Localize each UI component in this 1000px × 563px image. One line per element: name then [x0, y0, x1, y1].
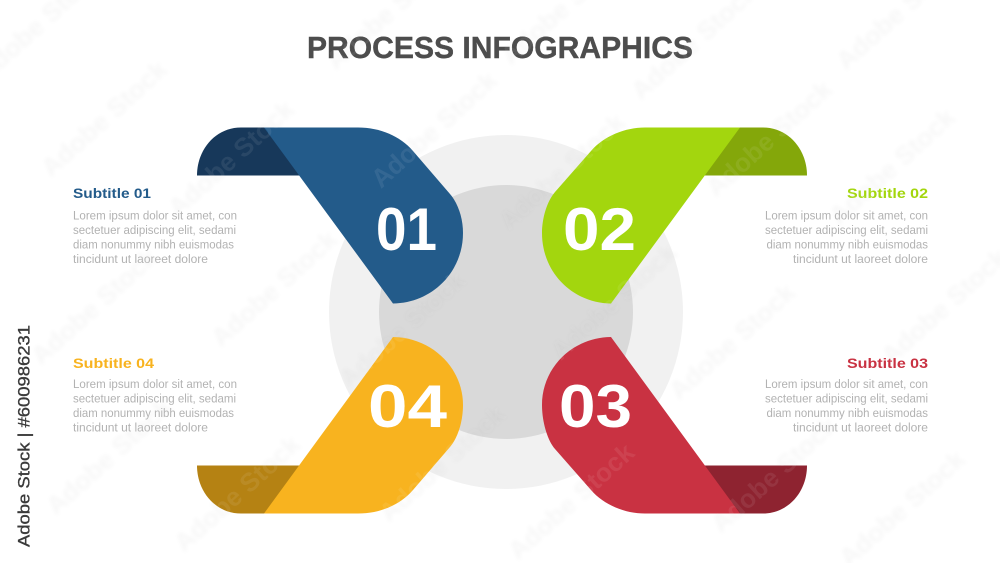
watermark: repeated Adobe Stock marks: Adobe Stock: [493, 107, 631, 236]
text block: subtitle 04: sectetuer adipiscing elit, sedami: [73, 392, 236, 406]
watermark: repeated Adobe Stock marks: Adobe Stock: [663, 277, 801, 406]
text block: subtitle 03: Lorem ipsum dolor sit amet, con: [765, 377, 928, 391]
watermark: repeated Adobe Stock marks: Adobe Stock: [365, 65, 503, 194]
watermark: repeated Adobe Stock marks: Adobe Stock: [333, 265, 471, 394]
stock id caption: Adobe Stock | #600986231: [14, 325, 34, 547]
text block: subtitle 01: Subtitle 01: [73, 185, 151, 201]
watermark shadow layer: Adobe Stock: [493, 107, 631, 236]
text block: subtitle 01: [73, 185, 237, 266]
watermark shadow layer: Adobe Stock: [502, 437, 640, 563]
watermark shadow layer: Adobe Stock: [40, 392, 178, 521]
panel: step 03 ribbon: [542, 337, 807, 514]
watermark shadow layer: Adobe Stock: [205, 224, 343, 353]
text block: subtitle 03: sectetuer adipiscing elit, sedami: [765, 392, 928, 406]
panel: step 02 ribbon: 02: [563, 196, 636, 263]
text block: subtitle 02: Lorem ipsum dolor sit amet, con: [765, 208, 928, 222]
text block: subtitle 02: tincidunt ut laoreet dolore: [793, 252, 928, 266]
panel: step 01 ribbon: 01: [376, 196, 437, 263]
text block: subtitle 04: Lorem ipsum dolor sit amet, con: [73, 377, 237, 391]
watermark shadow layer: Adobe Stock: [333, 265, 471, 394]
watermark shadow layer: Adobe Stock: [700, 74, 838, 203]
watermark shadow layer: Adobe Stock: [25, 242, 163, 371]
text block: subtitle 03: tincidunt ut laoreet dolore: [793, 420, 928, 434]
text block: subtitle 03: Subtitle 03: [847, 355, 928, 371]
panel: step 04 ribbon: 04: [368, 373, 448, 440]
text block: subtitle 02: Subtitle 02: [847, 185, 928, 201]
watermark: repeated Adobe Stock marks: Adobe Stock: [705, 410, 843, 539]
text block: subtitle 04: tincidunt ut laoreet dolore: [73, 420, 208, 434]
watermark shadow layer: Adobe Stock: [373, 399, 511, 528]
watermark: repeated Adobe Stock marks: Adobe Stock: [545, 237, 683, 366]
text block: subtitle 01: tincidunt ut laoreet dolore: [73, 252, 208, 266]
text block: subtitle 02: sectetuer adipiscing elit, sedami: [765, 223, 928, 237]
watermark: repeated Adobe Stock marks: Adobe Stock: [700, 74, 838, 203]
text block: subtitle 02: [765, 185, 928, 266]
watermark: repeated Adobe Stock marks: Adobe Stock: [40, 392, 178, 521]
watermark: repeated Adobe Stock marks: Adobe Stock: [168, 429, 306, 558]
text block: subtitle 01: sectetuer adipiscing elit, sedami: [73, 223, 236, 237]
watermark: repeated Adobe Stock marks: Adobe Stock: [162, 94, 300, 223]
watermark shadow layer: Adobe Stock: [663, 277, 801, 406]
text block: subtitle 03: [765, 355, 928, 434]
text block: subtitle 01: diam nonummy nibh euismodas: [73, 238, 234, 252]
panel: step 01 ribbon: [197, 128, 463, 304]
watermark: repeated Adobe Stock marks: Adobe Stock: [25, 242, 163, 371]
watermark shadow layer: Adobe Stock: [162, 94, 300, 223]
title: PROCESS INFOGRAPHICS: [307, 30, 693, 65]
text block: subtitle 04: diam nonummy nibh euismodas: [73, 406, 234, 420]
watermark shadow layer: Adobe Stock: [35, 54, 173, 183]
watermark: repeated Adobe Stock marks: Adobe Stock: [35, 54, 173, 183]
watermark: repeated Adobe Stock marks: Adobe Stock: [823, 102, 961, 231]
watermark: repeated Adobe Stock marks: Adobe Stock: [205, 224, 343, 353]
watermark shadow layer: Adobe Stock: [823, 102, 961, 231]
text block: subtitle 04: Subtitle 04: [73, 355, 154, 371]
text block: subtitle 01: Lorem ipsum dolor sit amet, con: [73, 208, 237, 222]
watermark shadow layer: Adobe Stock: [168, 429, 306, 558]
panel: step 04 ribbon: [197, 337, 463, 514]
watermark: repeated Adobe Stock marks: Adobe Stock: [373, 399, 511, 528]
panel: step 03 ribbon: 03: [559, 373, 632, 440]
watermark shadow layer: Adobe Stock: [705, 410, 843, 539]
panel: step 02 ribbon: [542, 128, 807, 304]
text block: subtitle 04: [73, 355, 237, 434]
watermark shadow layer: Adobe Stock: [365, 65, 503, 194]
watermark shadow layer: Adobe Stock: [545, 237, 683, 366]
text block: subtitle 03: diam nonummy nibh euismodas: [766, 406, 928, 420]
watermark: repeated Adobe Stock marks: Adobe Stock: [502, 437, 640, 563]
central circles: [329, 135, 683, 489]
text block: subtitle 02: diam nonummy nibh euismodas: [766, 238, 928, 252]
